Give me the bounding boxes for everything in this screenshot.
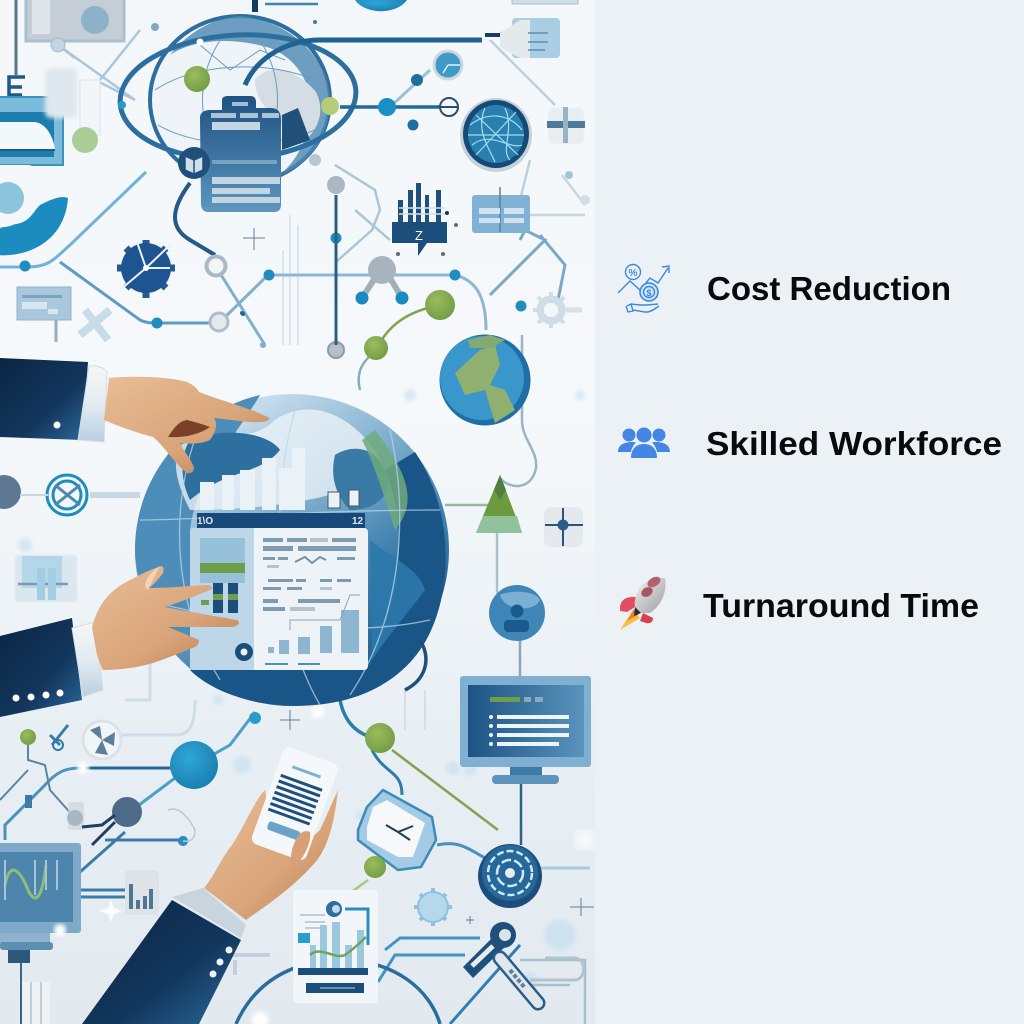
green connector lines <box>350 305 498 893</box>
icon: connector with ring <box>340 98 458 116</box>
icon: faded tile left <box>15 555 77 602</box>
icon: phone <box>250 745 340 862</box>
icon: key tool <box>463 922 538 1003</box>
icon: cost reduction <box>618 264 669 312</box>
chart: globe skyline bars <box>200 448 359 510</box>
decorative plus marks <box>243 228 594 924</box>
icon: left target ring <box>47 475 87 515</box>
icon: node with two legs <box>356 256 408 304</box>
icon: chart card <box>293 890 378 1003</box>
icon: top-left grey panel <box>26 0 159 52</box>
icon: pale ring connector <box>530 958 584 980</box>
icon: faded green dot <box>72 127 98 153</box>
icon: E connector <box>9 0 25 103</box>
icon: person globe <box>489 585 545 641</box>
icon: skyline chart: Z <box>415 228 423 243</box>
panel: header bar: 12 <box>352 516 364 527</box>
icon: green node near clock <box>364 856 386 878</box>
circuit lines: pale network <box>58 30 585 1024</box>
icon: green nodes <box>364 290 455 360</box>
icon: radar dial <box>478 844 542 908</box>
icon: plus tile <box>547 107 585 144</box>
icon: left pointing sleeve top <box>0 358 107 442</box>
icon: cost reduction: $ <box>646 288 652 298</box>
icon: mini chart tile <box>125 870 159 915</box>
icon: message card <box>472 171 590 233</box>
icon: skyline chart <box>392 183 458 256</box>
panel: illustration background <box>0 0 596 1024</box>
circuit nodes <box>20 74 526 846</box>
icon: pale cross <box>80 310 110 340</box>
icon: top-left window <box>0 97 63 165</box>
icon: reaching hand <box>92 566 239 670</box>
icon: book badge <box>178 147 210 179</box>
panel: header bar <box>197 513 365 528</box>
heading: turnaround time: Turnaround Time <box>703 587 979 624</box>
icon: pale gear <box>414 888 452 926</box>
icon: briefcase document <box>200 96 310 212</box>
icon: fan disc <box>83 721 121 759</box>
icon: clock gear <box>117 240 175 298</box>
icon: cost reduction: % <box>629 268 638 279</box>
icon: vertical line with grey ball <box>309 154 345 345</box>
panel: report card <box>190 528 368 670</box>
icon: small gear right <box>533 292 582 328</box>
icon: pale stripes <box>22 982 50 1024</box>
panel: central globe <box>135 394 449 706</box>
icon: rocket <box>620 575 666 630</box>
icon: plug device <box>485 18 560 58</box>
heading: skilled workforce: Skilled Workforce <box>706 425 1002 462</box>
icon: green pyramid <box>476 475 522 533</box>
icon: earth globe <box>440 334 530 426</box>
icon: square clock <box>358 790 436 870</box>
icon: green dot small left <box>20 729 36 760</box>
icon: top device fragments <box>255 0 578 24</box>
icon: lower sleeve <box>82 888 246 1024</box>
icon: grey node ring <box>210 312 344 358</box>
icon: holding hand <box>204 790 338 920</box>
icon: cable and ring <box>175 183 226 276</box>
icon: thumb over phone <box>288 831 310 872</box>
icon: skilled workforce team <box>618 428 670 458</box>
icon: pale card left <box>17 287 71 342</box>
icon: pointing hand <box>104 377 270 473</box>
panel: top globe with orbit <box>117 16 482 184</box>
panel: header bar: 1\O <box>197 516 213 527</box>
icon: left sleeve lower <box>0 618 103 717</box>
icon: grey ball at left edge <box>0 475 48 509</box>
circuit lines: blue network <box>0 70 590 1024</box>
panel: right column <box>595 0 1024 1024</box>
icon: right monitor <box>460 676 591 784</box>
icon: large gear left <box>0 165 68 255</box>
icon: pale plug block <box>45 68 100 135</box>
icon: blue ball <box>170 741 218 789</box>
icon: crosshair tile <box>544 507 583 547</box>
icon: green node lower <box>365 723 395 753</box>
icon: dark node cluster <box>25 795 195 846</box>
sparkles <box>54 706 594 1024</box>
heading: cost reduction: Cost Reduction <box>707 270 951 307</box>
icon: network globe <box>460 98 532 172</box>
icon: small clock <box>434 51 462 79</box>
icon: left monitor <box>0 843 81 1024</box>
